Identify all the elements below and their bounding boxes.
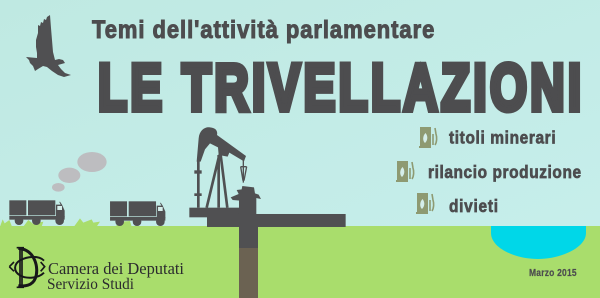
title: subtitle: Temi dell'attività parlamentare bbox=[92, 16, 434, 43]
icon: eagle bbox=[26, 15, 71, 77]
truck 2 bbox=[110, 201, 165, 226]
oil well shaft below ground bbox=[239, 226, 258, 298]
icon: fuel pump 3 bbox=[416, 193, 434, 214]
icon: fuel pump 2 bbox=[396, 161, 414, 182]
label: divieti: divieti bbox=[449, 196, 498, 216]
title: main: LE TRIVELLAZIONI bbox=[98, 51, 581, 125]
grass tufts bbox=[0, 218, 132, 227]
oil pump jack bbox=[194, 127, 261, 208]
icon: fuel pump 1 bbox=[419, 127, 437, 148]
smoke clouds bbox=[52, 152, 107, 192]
ground bbox=[0, 226, 600, 298]
institution name: Camera dei Deputati bbox=[48, 259, 184, 278]
label: rilancio produzione: rilancio produzione bbox=[428, 162, 581, 182]
sky background bbox=[0, 0, 600, 227]
logo: Camera dei Deputati monogram bbox=[9, 248, 45, 287]
date: Marzo 2015 bbox=[529, 267, 577, 278]
institution name bbox=[47, 259, 184, 293]
truck 1 bbox=[9, 200, 65, 225]
drilling platform bbox=[189, 197, 346, 227]
label: titoli minerari: titoli minerari bbox=[449, 127, 556, 148]
institution name: Servizio Studi bbox=[47, 276, 135, 293]
pond bbox=[491, 226, 586, 259]
